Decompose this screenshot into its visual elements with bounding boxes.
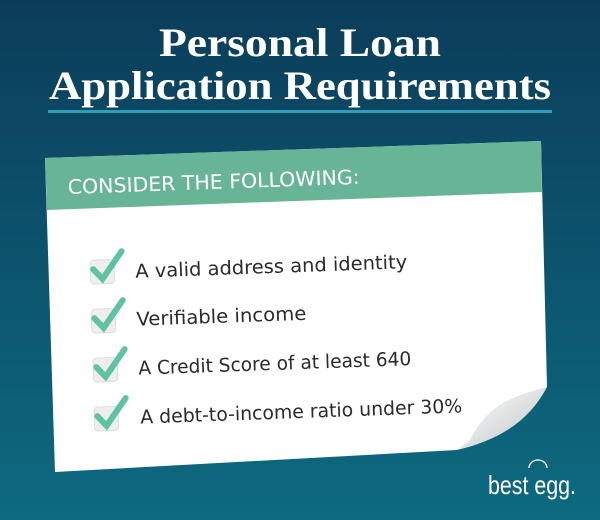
panel: checklist card — [45, 141, 547, 472]
item 1: A valid address and identity — [135, 251, 408, 283]
item 3 — [93, 339, 412, 382]
title: Personal Loan — [159, 20, 441, 65]
item 4 — [94, 386, 463, 431]
title: Application Requirements — [49, 63, 551, 108]
title — [49, 20, 551, 108]
header band: CONSIDER THE FOLLOWING: — [67, 165, 360, 199]
logo: best egg: best egg. — [488, 470, 576, 500]
page curl — [457, 387, 547, 450]
logo: best egg — [488, 460, 576, 500]
item 3: A Credit Score of at least 640 — [138, 348, 412, 380]
item 2: Verifiable income — [136, 303, 307, 331]
list items — [90, 241, 463, 431]
header band — [45, 141, 542, 210]
item 4: A debt-to-income ratio under 30% — [140, 395, 463, 429]
item 1 — [90, 241, 408, 284]
item 2 — [91, 294, 307, 333]
